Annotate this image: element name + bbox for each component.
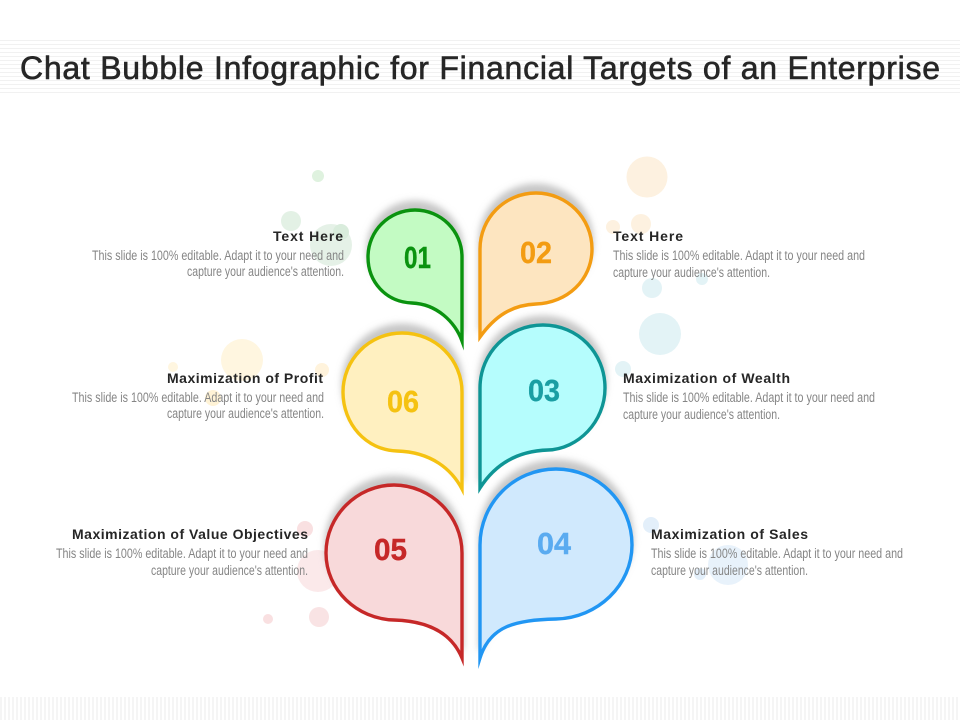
text block 04: Maximization of Sales [651,526,808,542]
text block 03: capture your audience's attention. [623,407,780,422]
bubble 04: 04 [537,526,572,561]
text block 02 [613,228,865,280]
bubble 03 [480,317,605,488]
text block 06 [72,370,324,421]
text block 03: This slide is 100% editable. Adapt it to your need and [623,390,875,405]
bubble 04 [480,461,632,658]
bubble 05: 05 [374,532,407,567]
bubble 02 [480,185,592,337]
text block 01: This slide is 100% editable. Adapt it to your need and [92,248,344,263]
bubble 01: 01 [404,240,431,275]
bubble 02: 02 [520,235,552,270]
text block 04 [651,526,903,578]
text block 05: This slide is 100% editable. Adapt it to your need and [56,546,308,561]
bubble 03: 03 [528,373,560,408]
text block 02: capture your audience's attention. [613,265,770,280]
text block 06: Maximization of Profit [167,370,323,386]
text block 05: Maximization of Value Objectives [72,526,308,542]
bubble 05 [326,477,462,658]
text block 01 [92,228,344,279]
text block 03: Maximization of Wealth [623,370,790,386]
text block 01: Text Here [273,228,343,244]
text block 04: This slide is 100% editable. Adapt it to your need and [651,546,903,561]
text block 06: This slide is 100% editable. Adapt it to your need and [72,390,324,405]
text block 03 [623,370,875,422]
text block 02: This slide is 100% editable. Adapt it to your need and [613,248,865,263]
text block 02: Text Here [613,228,683,244]
bubble 06 [343,325,462,489]
text block 04: capture your audience's attention. [651,563,808,578]
bubble 01 [368,202,462,341]
text block 06: capture your audience's attention. [167,406,324,421]
background dots [168,156,748,627]
text block 05: capture your audience's attention. [151,563,308,578]
text block 05 [56,526,308,578]
text block 01: capture your audience's attention. [187,264,344,279]
title: Chat Bubble Infographic for Financial Targets of an Enterprise [20,50,940,86]
bubble 06: 06 [387,384,419,419]
